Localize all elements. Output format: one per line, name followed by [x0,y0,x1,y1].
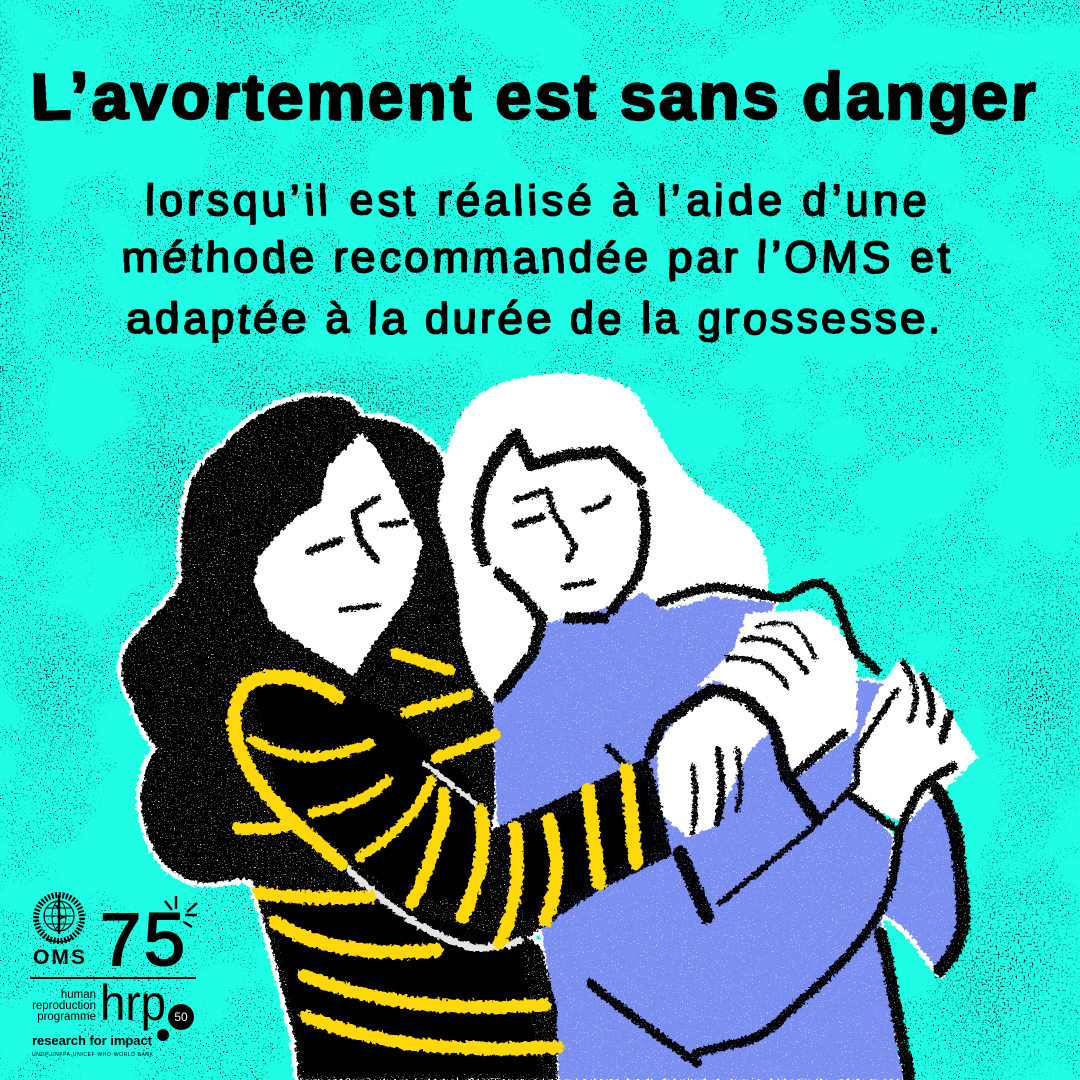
logos: OMS 75 and HRP 50 [30,895,197,1058]
top sleeve outline [660,583,877,670]
left woman hair in black chalk [122,397,672,1080]
hrp 50 badge: 50 [174,1010,188,1024]
sweater body lines [697,767,953,1053]
human reproduction programme [32,989,96,1023]
right woman facial features [516,490,575,560]
fingers of the far hand [903,663,916,720]
icon: WHO emblem [36,895,82,942]
left woman face [254,433,423,677]
yellow stripes on the top [234,653,636,1049]
fingers of the upper hand [757,623,815,658]
subtitle line 3: adaptée à la durée de la grossesse. [127,294,940,343]
75 anniversary mark: 75 [100,898,185,981]
white hair and halo of the right woman [122,373,978,1080]
solid black of the striped top and arm [250,680,655,1075]
white seam of the arm [349,763,520,948]
human reproduction programme: reproduction [32,1000,96,1012]
subtitle text block [122,176,950,343]
right woman head outline [477,435,640,560]
human reproduction programme: programme [37,1011,96,1023]
logo divider [30,977,196,979]
subtitle line 1: lorsqu’il est réalisé à l’aide d’une [145,176,927,225]
hrp dot [157,1029,169,1041]
illustration: two women embracing [122,373,978,1080]
hands in white [657,610,973,837]
title: L’avortement est sans danger [31,59,1036,133]
blue sweater of the right woman [493,592,963,1080]
human reproduction programme: human [61,989,96,1001]
hrp 50 badge [168,1004,194,1030]
left woman facial features [309,498,406,610]
subtitle line 2: méthode recommandée par l’OMS et [122,233,950,282]
partners line: UNDP·UNFPA·UNICEF·WHO·WORLD BANK [32,1052,154,1058]
research for impact: research for impact [32,1033,153,1048]
front hand outline [650,690,817,820]
hrp wordmark: hrp [100,975,166,1031]
right woman face outlines and hand lines [477,435,963,1080]
OMS wordmark: OMS [33,946,85,969]
